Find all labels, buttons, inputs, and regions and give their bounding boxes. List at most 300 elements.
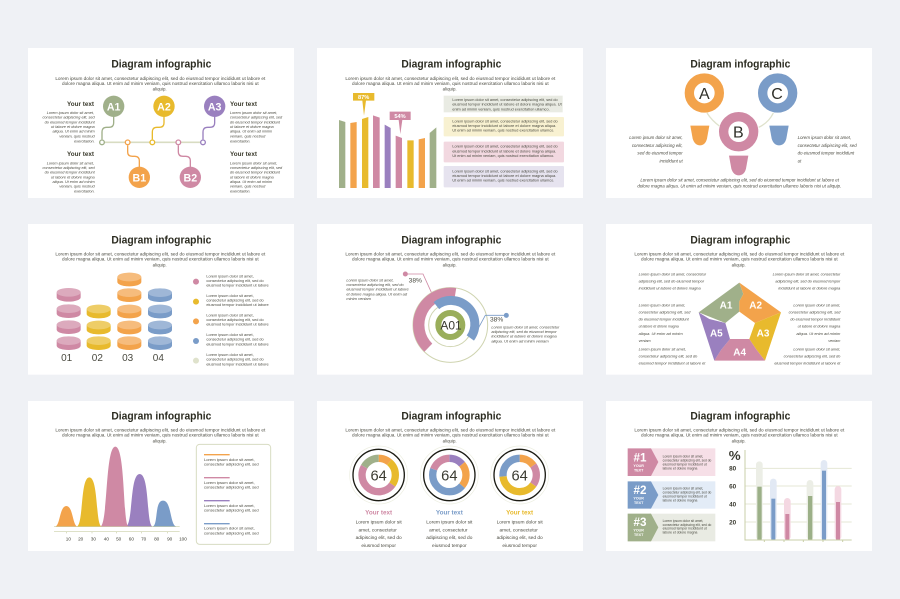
text right: incididunt ut labore et dolore magna	[491, 334, 557, 339]
bar chart	[339, 115, 436, 188]
text block left top: Your text	[67, 101, 95, 108]
intro text: dolore magna aliqua. Ut enim ad minim veniam, quis nostrud exercitation ullamco laboris nisi ut	[62, 433, 259, 439]
text block left bottom: veniam, quis nostrud	[59, 185, 96, 189]
legend entries: consectetur adipiscing elit, sed	[204, 530, 259, 535]
ring A	[689, 78, 719, 108]
intro text: Lorem ipsum dolor sit amet, consectetur adipiscing elit, sed do eiusmod tempor incididunt ut labore et	[345, 428, 556, 434]
text block right bottom: ut labore et dolore magna	[230, 175, 274, 179]
area chart	[55, 447, 177, 527]
text mid left: aliqua. Ut enim ad minim	[639, 331, 683, 336]
axis labels: 30	[91, 537, 96, 542]
chart axes	[745, 450, 852, 542]
item #3: labore et dolore magna	[663, 531, 697, 535]
item #2: #2	[634, 484, 647, 497]
item #1: TEXT	[634, 468, 644, 472]
caption 3: Lorem ipsum dolor sit	[497, 520, 543, 526]
text block right bottom: do eiusmod tempor incididunt	[230, 171, 281, 175]
text left: Lorem ipsum dolor sit amet,	[629, 135, 683, 140]
panel: timeline	[28, 48, 294, 198]
caption 2: eiusmod tempor	[432, 543, 467, 549]
text left: eiusmod tempor incididunt ut labore	[346, 287, 409, 292]
text block right bottom	[230, 151, 283, 193]
text block left top	[43, 101, 96, 143]
intro text	[345, 428, 556, 444]
legend text: Lorem ipsum dolor sit amet,	[206, 332, 254, 337]
intro text	[634, 252, 845, 268]
pentagon segments: A4	[733, 347, 746, 358]
intro text: Lorem ipsum dolor sit amet, consectetur adipiscing elit, sed do eiusmod tempor incididunt ut labore et	[345, 252, 556, 258]
donut 2	[420, 446, 478, 504]
intro text: aliquip.	[153, 438, 167, 444]
item #2: Lorem ipsum dolor sit amet,	[663, 487, 703, 491]
legend text: consectetur adipiscing elit, sed do	[206, 297, 264, 302]
text top right: Lorem ipsum dolor sit amet, consectetur	[773, 271, 841, 276]
text mid right: do eiusmod tempor incididunt	[790, 316, 841, 321]
text bottom left	[639, 347, 706, 366]
legend text: eiusmod tempor incididunt ut labore	[206, 322, 269, 327]
caption 2: amet, consectetur	[429, 527, 468, 533]
note box 3	[444, 142, 564, 162]
text block right bottom: consectetur adipiscing elit, sed	[230, 166, 283, 170]
note box 4: Ut enim ad minim veniam, quis nostrud exercitation ullamco.	[452, 178, 554, 183]
caption 1: amet, consectetur	[358, 527, 397, 533]
intro text: aliquip.	[443, 86, 457, 92]
blue arc	[436, 300, 475, 338]
intro text: dolore magna aliqua. Ut enim ad minim veniam, quis nostrud exercitation ullamco laboris nisi ut	[641, 433, 838, 439]
text block right top: Your text	[230, 101, 258, 108]
text mid left: consectetur adipiscing elit, sed	[639, 310, 691, 315]
text bottom right	[774, 347, 841, 366]
text left: minim veniam	[346, 296, 372, 301]
text block right bottom: Lorem ipsum dolor sit amet,	[230, 161, 277, 165]
caption 3: amet, consectetur	[499, 527, 538, 533]
text block right top: aliqua. Ut enim ad minim	[230, 130, 273, 134]
intro text: Lorem ipsum dolor sit amet, consectetur adipiscing elit, sed do eiusmod tempor incididunt ut labore et	[55, 76, 266, 82]
text bottom right: Lorem ipsum dolor sit amet,	[793, 347, 840, 352]
cup blue	[769, 126, 789, 145]
text block right top: ut labore et dolore magna	[230, 125, 274, 129]
text left: consectetur adipiscing elit,	[632, 143, 683, 148]
centre ring	[438, 313, 462, 337]
item #3: eiusmod tempor incididunt ut	[663, 527, 707, 531]
guide circles	[413, 288, 488, 362]
leader blue	[477, 313, 509, 331]
text block right bottom: exercitation.	[230, 189, 251, 193]
intro text: dolore magna aliqua. Ut enim ad minim veniam, quis nostrud exercitation ullamco laboris nisi ut	[352, 257, 549, 263]
text right	[798, 135, 857, 164]
panel: numbered list and chart	[606, 401, 872, 551]
caption 3: eiusmod tempor	[502, 543, 537, 549]
item #2: consectetur adipiscing elit, sed do	[663, 491, 711, 495]
intro text: dolore magna aliqua. Ut enim ad minim veniam, quis nostrud exercitation ullamco laboris nisi ut	[352, 433, 549, 439]
chart labels: 80	[729, 466, 737, 473]
ring B: B	[733, 125, 744, 142]
heading: Diagram infographic	[690, 234, 790, 246]
text bottom right: consectetur adipiscing elit, sed do	[784, 354, 841, 359]
caption 1: adipiscing elit, sed do	[356, 535, 402, 541]
panel: concentric arcs	[317, 224, 583, 375]
axis	[54, 527, 180, 533]
legend text: eiusmod tempor incididunt ut labore	[206, 362, 269, 367]
intro text: Lorem ipsum dolor sit amet, consectetur adipiscing elit, sed do eiusmod tempor incididunt ut labore et	[634, 428, 845, 434]
legend text: consectetur adipiscing elit, sed do	[206, 317, 264, 322]
item #2: TEXT	[634, 501, 644, 505]
intro text: aliquip.	[732, 438, 746, 444]
text block right top: do eiusmod tempor incididunt	[230, 120, 281, 124]
text bottom: dolore magna aliqua. Ut enim ad minim veniam, quis nostrud exercitation ullamco laboris nisi ut aliquip.	[637, 183, 841, 188]
timeline nodes	[100, 140, 205, 145]
legend entries	[204, 455, 259, 535]
note box 2: Lorem ipsum dolor sit amet, consectetur adipiscing elit, sed do	[452, 118, 558, 123]
text left	[346, 277, 409, 301]
donut 2: 64	[441, 468, 457, 484]
caption 2: adipiscing elit, sed do	[426, 535, 473, 541]
text block left bottom: do eiusmod tempor incididunt	[45, 171, 96, 175]
intro text	[55, 252, 266, 268]
heading: Diagram infographic	[690, 58, 790, 70]
legend text: Lorem ipsum dolor sit amet,	[206, 274, 254, 279]
text top left	[639, 271, 707, 291]
text right: ut	[798, 159, 802, 164]
caption 2: Lorem ipsum dolor sit	[426, 520, 473, 526]
ring A: A	[699, 86, 710, 103]
intro text: Lorem ipsum dolor sit amet, consectetur adipiscing elit, sed do eiusmod tempor incididunt ut labore et	[345, 76, 556, 82]
intro text: dolore magna aliqua. Ut enim ad minim veniam, quis nostrud exercitation ullamco laboris nisi ut	[641, 257, 838, 263]
caption 2: Your text	[436, 510, 464, 517]
heading: Diagram infographic	[111, 234, 211, 246]
axis labels: 50	[116, 537, 122, 542]
heading: Diagram infographic	[111, 410, 211, 422]
donut 1	[350, 446, 408, 504]
stack labels: 03	[122, 353, 134, 364]
pentagon segments: A1	[720, 301, 733, 312]
text bottom: Lorem ipsum dolor sit amet, consectetur adipiscing elit, sed do eiusmod tempor incididunt ut labore et	[640, 178, 840, 183]
text top right	[773, 271, 841, 291]
text mid right: aliqua. Ut enim ad minim	[796, 331, 841, 336]
chart grid	[745, 468, 852, 522]
chart labels: %	[729, 448, 741, 463]
cup pink	[729, 156, 748, 175]
intro text: aliquip.	[443, 262, 457, 268]
legend entries: Lorem ipsum dolor sit amet,	[204, 503, 255, 508]
text block left top: aliqua. Ut enim ad minim	[53, 130, 95, 134]
caption 1	[356, 510, 402, 549]
legend text	[206, 274, 269, 367]
node circles	[103, 96, 225, 188]
text block right top: exercitation.	[230, 139, 251, 143]
chart labels: 20	[729, 519, 737, 526]
panel: pentagon	[606, 224, 872, 375]
text right	[491, 325, 560, 343]
text right: do eiusmod tempor incididunt	[798, 151, 855, 156]
axis labels: 70	[141, 537, 147, 542]
text top left: Lorem ipsum dolor sit amet, consectetur	[639, 271, 707, 276]
text mid right: consectetur adipiscing elit, sed	[789, 310, 841, 315]
item #3: YOUR	[633, 529, 644, 533]
stack 01	[57, 288, 81, 350]
text right: aliqua. Ut enim ad minim veniam	[491, 338, 549, 343]
intro text	[55, 76, 266, 92]
text bottom left: eiusmod tempor incididunt ut labore et	[639, 361, 706, 366]
connectors	[102, 116, 215, 167]
intro text: Lorem ipsum dolor sit amet, consectetur adipiscing elit, sed do eiusmod tempor incididunt ut labore et	[634, 252, 845, 258]
note box 2: eiusmod tempor incididunt ut labore et dolore magna aliqua.	[452, 123, 556, 128]
text mid right: veniam	[828, 338, 841, 343]
legend text: consectetur adipiscing elit, sed do	[206, 356, 264, 361]
item #2	[628, 481, 715, 509]
heading: Diagram infographic	[401, 58, 501, 70]
text left: sed do eiusmod tempor	[637, 151, 683, 156]
panel: cylinder stacks	[28, 224, 294, 375]
panel: bars with notes	[317, 48, 583, 198]
pentagon segments: A3	[757, 328, 770, 339]
intro text	[634, 428, 845, 444]
text block left bottom: Lorem ipsum dolor sit amet,	[47, 161, 94, 165]
text block right top: consectetur adipiscing elit, sed	[230, 116, 283, 120]
intro text: aliquip.	[732, 262, 746, 268]
caption 3: Your text	[506, 510, 534, 517]
legend text: consectetur adipiscing elit, sed do	[206, 336, 264, 341]
text bottom left: consectetur adipiscing elit, sed do	[639, 354, 698, 359]
chart labels	[729, 448, 741, 526]
donut 1: 64	[371, 468, 387, 484]
legend text: eiusmod tempor incididunt ut labore	[206, 341, 269, 346]
text mid right: ut labore et dolore magna	[798, 324, 841, 329]
text left: et dolore magna aliqua. Ut enim ad	[346, 291, 408, 296]
text block left top: Lorem ipsum dolor sit amet,	[47, 111, 94, 115]
item #3: Lorem ipsum dolor sit amet,	[663, 519, 703, 523]
text mid left: Lorem ipsum dolor sit amet,	[639, 303, 685, 308]
axis labels: 60	[129, 537, 134, 542]
note box 4	[444, 166, 564, 187]
intro text: dolore magna aliqua. Ut enim ad minim veniam, quis nostrud exercitation ullamco laboris nisi ut	[352, 81, 549, 87]
axis labels: 80	[154, 537, 160, 542]
legend dots	[193, 279, 199, 364]
note box 1: eiusmod tempor incididunt ut labore et dolore magna aliqua. Ut	[452, 102, 563, 107]
note box 1: enim ad minim veniam, quis nostrud exercitation ullamco.	[452, 106, 550, 111]
intro text	[345, 252, 556, 268]
text bottom right: eiusmod tempor incididunt ut labore et	[774, 361, 841, 366]
node circles: B1	[133, 172, 146, 184]
legend entries: Lorem ipsum dolor sit amet,	[204, 526, 255, 531]
ring C	[763, 78, 793, 108]
caption 1: Your text	[365, 510, 393, 517]
pentagon segments: A5	[710, 328, 723, 339]
text mid right	[789, 303, 841, 343]
intro text: aliquip.	[443, 438, 457, 444]
legend entries: consectetur adipiscing elit, sed	[204, 508, 259, 513]
text bottom	[637, 178, 841, 188]
text block right bottom: Your text	[230, 151, 258, 158]
text left: incididunt ut	[660, 159, 683, 164]
intro text: aliquip.	[153, 262, 167, 268]
text right: Lorem ipsum dolor sit amet,	[798, 135, 851, 140]
note box 1	[444, 96, 563, 112]
value 38%: 38%	[490, 317, 503, 324]
text mid left	[639, 303, 691, 343]
stack 02	[87, 305, 111, 350]
axis labels: 90	[167, 537, 173, 542]
node circles: A1	[107, 101, 121, 113]
item #2: eiusmod tempor incididunt ut	[663, 494, 707, 498]
text block left top: exercitation.	[74, 139, 95, 143]
pentagon segments: A2	[749, 301, 762, 312]
panel: donuts	[317, 401, 583, 551]
stack labels	[61, 353, 164, 364]
axis labels	[66, 537, 187, 542]
caption 3: adipiscing elit, sed do	[497, 535, 543, 541]
text top right: incididunt ut labore et dolore magna	[778, 286, 841, 291]
heading: Diagram infographic	[111, 58, 211, 70]
note box 4: eiusmod tempor incididunt ut labore et dolore magna aliqua.	[452, 173, 556, 178]
item #1: consectetur adipiscing elit, sed do	[663, 459, 711, 463]
legend entries: consectetur adipiscing elit, sed	[204, 462, 259, 467]
intro text: aliquip.	[153, 86, 167, 92]
text top right: adipiscing elit, sed do eiusmod tempor	[775, 278, 841, 283]
legend text: Lorem ipsum dolor sit amet,	[206, 293, 254, 298]
text right: Lorem ipsum dolor sit amet, consectetur	[491, 325, 560, 330]
legend entries: Lorem ipsum dolor sit amet,	[204, 457, 255, 462]
text left: Lorem ipsum dolor sit amet,	[346, 277, 394, 282]
legend text: eiusmod tempor incididunt ut labore	[206, 283, 269, 288]
note box 1: Lorem ipsum dolor sit amet, consectetur adipiscing elit, sed do	[452, 97, 558, 102]
item #3: #3	[634, 516, 647, 529]
text block left bottom: aliqua. Ut enim ad minim	[53, 180, 95, 184]
text block right top: veniam, quis nostrud	[230, 134, 266, 138]
caption 1: eiusmod tempor	[361, 543, 396, 549]
item #2: labore et dolore magna	[663, 498, 697, 502]
note box 2: Ut enim ad minim veniam, quis nostrud exercitation ullamco.	[452, 128, 554, 133]
heading: Diagram infographic	[401, 410, 501, 422]
thermometer bars	[756, 460, 841, 540]
legend text: eiusmod tempor incididunt ut labore	[206, 302, 269, 307]
caption 2	[426, 510, 473, 549]
stack labels: 04	[153, 353, 164, 364]
item #2: YOUR	[633, 497, 644, 501]
text block left bottom: ut labore et dolore magna	[51, 175, 95, 179]
text block left bottom	[43, 151, 96, 193]
intro text: Lorem ipsum dolor sit amet, consectetur adipiscing elit, sed do eiusmod tempor incididunt ut labore et	[55, 428, 266, 434]
item #1: YOUR	[633, 464, 644, 468]
intro text	[55, 428, 266, 444]
text mid right: Lorem ipsum dolor sit amet,	[793, 303, 840, 308]
pentagon segments	[699, 283, 781, 361]
ring C: C	[771, 86, 783, 103]
connectors	[707, 113, 773, 127]
text mid left: do eiusmod tempor incididunt	[639, 316, 690, 321]
panel: bell curves	[28, 401, 294, 551]
axis labels: 40	[104, 537, 109, 542]
chart labels: 40	[729, 501, 737, 508]
axis labels: 10	[66, 537, 71, 542]
text left: consectetur adipiscing elit, sed do	[346, 282, 404, 287]
value 38%: 38%	[409, 278, 422, 285]
legend text: Lorem ipsum dolor sit amet,	[206, 352, 254, 357]
text block right top: Lorem ipsum dolor sit amet,	[230, 111, 277, 115]
donut 3: 64	[512, 468, 528, 484]
axis labels: 100	[179, 537, 187, 542]
chart labels: 60	[729, 483, 737, 490]
text top left: incididunt ut labore et dolore magna	[639, 286, 701, 291]
intro text: dolore magna aliqua. Ut enim ad minim veniam, quis nostrud exercitation ullamco laboris nisi ut	[62, 81, 259, 87]
note box 3: Ut enim ad minim veniam, quis nostrud exercitation ullamco.	[452, 153, 554, 158]
ring B	[724, 117, 754, 147]
text block left top: veniam, quis nostrud	[59, 134, 96, 138]
stack labels: 02	[92, 353, 103, 364]
legend entries: Lorem ipsum dolor sit amet,	[204, 480, 255, 485]
axis labels: 20	[78, 537, 84, 542]
text left	[629, 135, 683, 164]
item #1: eiusmod tempor incididunt ut	[663, 462, 707, 466]
intro text: Lorem ipsum dolor sit amet, consectetur adipiscing elit, sed do eiusmod tempor incididunt ut labore et	[55, 252, 266, 258]
node circles: A3	[208, 101, 222, 113]
item #1: labore et dolore magna	[663, 466, 697, 470]
stack 04	[148, 288, 172, 350]
callout 54%	[390, 112, 411, 134]
text mid left: veniam	[639, 338, 651, 343]
text block left top: ut labore et dolore magna	[51, 125, 95, 129]
stack 03	[117, 273, 141, 350]
panel: ABC rings	[606, 48, 872, 198]
donut 3	[491, 446, 549, 504]
item #3: consectetur adipiscing elit, sed do	[663, 523, 711, 527]
heading: Diagram infographic	[690, 410, 790, 422]
legend text: Lorem ipsum dolor sit amet,	[206, 313, 254, 318]
text block left bottom: exercitation.	[74, 189, 95, 193]
legend text: consectetur adipiscing elit, sed do	[206, 278, 264, 283]
callout 87%: 87%	[358, 95, 369, 101]
cup orange	[690, 126, 709, 145]
stack labels: 01	[61, 353, 73, 364]
item #3: TEXT	[634, 533, 644, 537]
legend panel	[196, 444, 271, 544]
text mid left: ut labore et dolore magna	[639, 324, 679, 329]
note box 2	[444, 117, 564, 136]
caption 3	[497, 510, 543, 549]
heading: Diagram infographic	[401, 234, 501, 246]
note box 3: Lorem ipsum dolor sit amet, consectetur adipiscing elit, sed do	[452, 144, 558, 149]
text block right top	[230, 101, 283, 143]
note box 4: Lorem ipsum dolor sit amet, consectetur adipiscing elit, sed do	[452, 168, 558, 173]
intro text: dolore magna aliqua. Ut enim ad minim veniam, quis nostrud exercitation ullamco laboris nisi ut	[62, 257, 259, 263]
pink arc	[419, 293, 455, 348]
text right: adipiscing elit, sed do eiusmod tempor	[491, 329, 557, 334]
caption 1: Lorem ipsum dolor sit	[356, 520, 402, 526]
intro text	[345, 76, 556, 92]
text bottom left: Lorem ipsum dolor sit amet,	[639, 347, 686, 352]
callout 54%: 54%	[394, 114, 406, 120]
text block right bottom: aliqua. Ut enim ad minim	[230, 180, 273, 184]
text top left: adipiscing elit, sed do eiusmod tempor	[639, 278, 705, 283]
timeline axis	[102, 140, 203, 145]
legend entries: consectetur adipiscing elit, sed	[204, 485, 259, 490]
leader pink	[403, 271, 431, 292]
node circles: A2	[157, 101, 171, 113]
item #1: #1	[634, 451, 647, 464]
item #1	[628, 448, 715, 476]
centre ring: A01	[440, 318, 462, 332]
callout 87%	[353, 93, 374, 116]
text block left bottom: Your text	[67, 151, 95, 158]
text block left bottom: consectetur adipiscing elit, sed	[43, 166, 96, 170]
text block left top: do eiusmod tempor incididunt	[45, 120, 96, 124]
note box 3: eiusmod tempor incididunt ut labore et dolore magna aliqua.	[452, 148, 556, 153]
text block right bottom: veniam, quis nostrud	[230, 185, 266, 189]
node circles: B2	[184, 172, 197, 184]
text right: consectetur adipiscing elit, sed	[798, 143, 857, 148]
text block left top: consectetur adipiscing elit, sed	[43, 116, 96, 120]
item #1: Lorem ipsum dolor sit amet,	[663, 455, 703, 459]
